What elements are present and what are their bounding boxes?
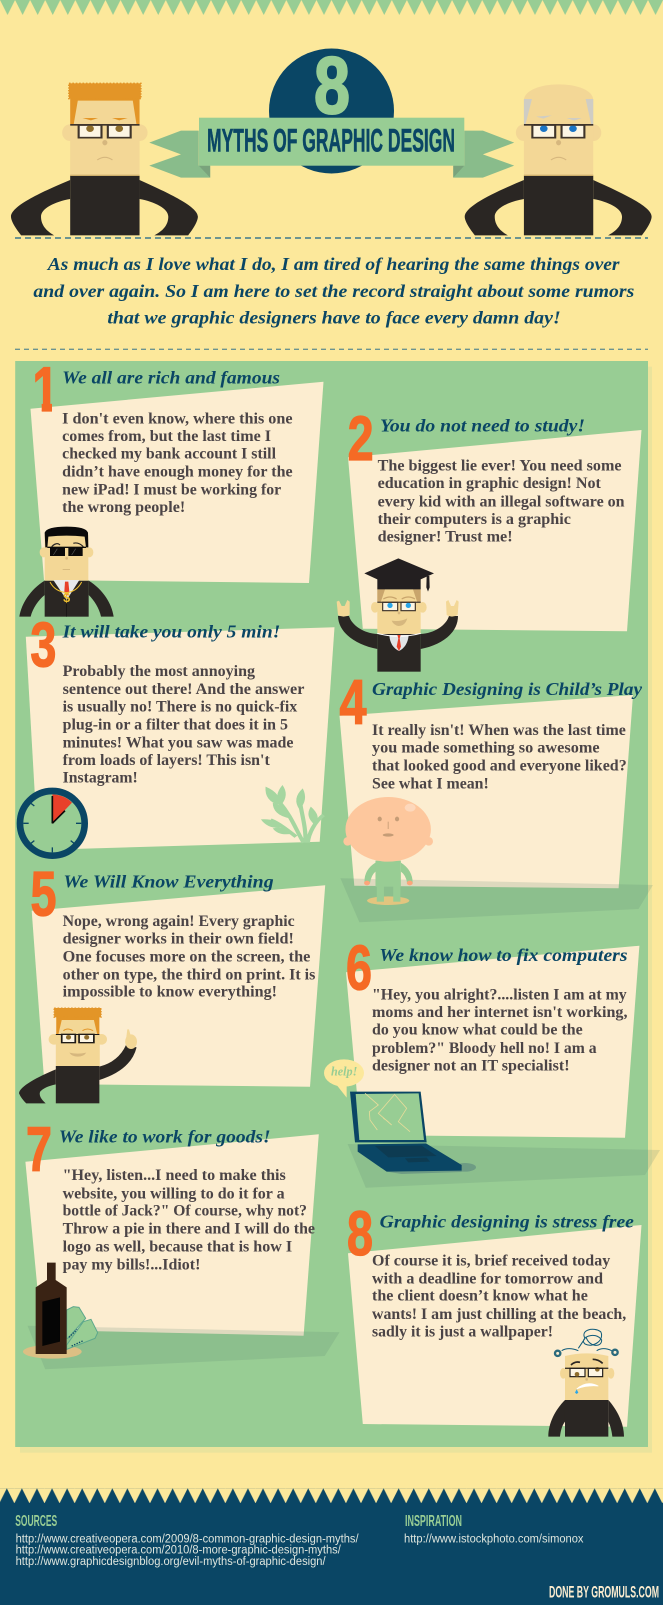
inspiration heading: INSPIRATION xyxy=(405,1513,462,1530)
body 3: Instagram! xyxy=(63,770,138,787)
myth 3 xyxy=(20,610,335,856)
character: baby xyxy=(343,797,433,905)
body 2: The biggest lie ever! You need some xyxy=(378,457,622,474)
card 6 xyxy=(346,946,639,1138)
big number 8: 8 xyxy=(314,41,350,131)
body 8: with a deadline for tomorrow and xyxy=(372,1270,603,1287)
number 3: 3 xyxy=(30,610,56,680)
intro text xyxy=(33,254,634,328)
ribbon tails xyxy=(149,131,514,178)
icon: broken laptop xyxy=(350,1092,476,1174)
card 1 xyxy=(30,382,324,583)
body 5: designer works in their own field! xyxy=(63,930,294,947)
body 2: their computers is a graphic xyxy=(378,511,571,528)
number 5: 5 xyxy=(30,860,56,930)
body 5 xyxy=(63,913,315,1001)
body 8: the client doesn’t know what he xyxy=(372,1288,588,1305)
ground shadow xyxy=(348,1144,660,1188)
heading 3: It will take you only 5 min! xyxy=(61,622,280,642)
navy circle xyxy=(269,48,394,174)
body 7 xyxy=(63,1167,315,1273)
character: designer with orange hair xyxy=(11,83,198,235)
ribbon band xyxy=(199,118,464,166)
myth 1 xyxy=(19,355,323,617)
body 2: every kid with an illegal software on xyxy=(378,493,625,510)
card 3 xyxy=(26,627,335,850)
number 2: 2 xyxy=(348,404,374,474)
card 2 xyxy=(348,430,642,631)
inspiration link: http://www.istockphoto.com/simonox xyxy=(404,1533,584,1545)
body 7: pay my bills!...Idiot! xyxy=(63,1256,200,1273)
intro text: that we graphic designers have to face every damn day! xyxy=(107,308,561,328)
body 1: the wrong people! xyxy=(62,499,185,516)
body 8: sadly it is just a wallpaper! xyxy=(372,1324,553,1341)
body 4: See what I mean! xyxy=(372,775,489,792)
myth 8 xyxy=(347,1199,642,1437)
source links: http://www.creativeopera.com/2010/8-more-graphic-design-myths/ xyxy=(16,1545,342,1557)
body 6: problem?" Bloody hell no! I am a xyxy=(372,1040,597,1057)
body 6 xyxy=(372,986,628,1074)
ground shadow xyxy=(340,878,653,922)
card 5 xyxy=(32,885,325,1087)
body 5: Nope, wrong again! Every graphic xyxy=(63,913,295,930)
body 2: education in graphic design! Not xyxy=(378,475,602,492)
number 4: 4 xyxy=(340,668,366,738)
character: designer pointing up xyxy=(19,1008,137,1103)
body 3: Probably the most annoying xyxy=(63,663,255,680)
body 7: logo as well, because that is how I xyxy=(63,1239,292,1256)
body 3: sentence out there! And the answer xyxy=(63,681,305,698)
myth 6 xyxy=(324,934,660,1188)
body 5: impossible to know everything! xyxy=(63,984,277,1001)
body 3 xyxy=(63,663,305,787)
number 8: 8 xyxy=(347,1199,373,1269)
body 7: website, you willing to do it for a xyxy=(63,1185,285,1202)
body 4: that looked good and everyone liked? xyxy=(372,757,627,774)
body 8: Of course it is, brief received today xyxy=(372,1253,610,1270)
myth 5 xyxy=(19,860,325,1103)
body 1: new iPad! I must be working for xyxy=(62,481,281,498)
body 8 xyxy=(372,1253,626,1341)
body 8: wants! I am just chilling at the beach, xyxy=(372,1306,626,1323)
card 7 xyxy=(25,1134,319,1336)
body 6: designer not an IT specialist! xyxy=(372,1057,570,1074)
body 2: designer! Trust me! xyxy=(378,528,513,545)
heading 4: Graphic Designing is Child’s Play xyxy=(372,679,642,699)
character: designer with grey hair xyxy=(465,84,652,235)
source links: http://www.creativeopera.com/2009/8-common-graphic-design-myths/ xyxy=(16,1533,359,1545)
myth 4 xyxy=(340,668,653,922)
speech bubble: help xyxy=(324,1059,364,1098)
body 7: "Hey, listen...I need to make this xyxy=(63,1167,286,1184)
card 8 xyxy=(348,1225,642,1427)
body 6: "Hey, you alright?....listen I am at my xyxy=(372,986,627,1003)
heading 7: We like to work for goods! xyxy=(59,1127,271,1147)
character: graduate xyxy=(337,558,459,672)
heading 8: Graphic designing is stress free xyxy=(380,1211,634,1231)
body 3: plug-in or a filter that does it in 5 xyxy=(63,716,288,733)
body 1: comes from, but the last time I xyxy=(62,428,271,445)
footer xyxy=(0,1488,663,1605)
character: rich man with sunglasses xyxy=(19,527,114,617)
body 7: bottle of Jack?" Of course, why not? xyxy=(63,1203,307,1220)
intro text: and over again. So I am here to set the record straight about some rumors xyxy=(33,281,634,301)
body 4: It really isn't! When was the last time xyxy=(372,722,626,739)
heading 2: You do not need to study! xyxy=(380,416,585,436)
icon: clock xyxy=(20,791,85,856)
body 4: you made something so awesome xyxy=(372,740,600,757)
character: stressed designer xyxy=(548,1329,624,1437)
sources heading: SOURCES xyxy=(15,1513,57,1530)
heading 5: We Will Know Everything xyxy=(63,872,274,892)
myth 2 xyxy=(337,404,642,672)
body 1: I don't even know, where this one xyxy=(62,410,293,427)
body 6: moms and her internet isn't working, xyxy=(372,1004,628,1021)
heading 1: We all are rich and famous xyxy=(62,367,280,387)
source links: http://www.graphicdesignblog.org/evil-myths-of-graphic-design/ xyxy=(16,1556,326,1568)
title badge xyxy=(149,41,514,178)
body 5: other on type, the third on print. It is xyxy=(63,966,315,983)
myth 7 xyxy=(23,1115,340,1369)
number 7: 7 xyxy=(26,1115,52,1185)
heading 6: We know how to fix computers xyxy=(379,945,628,965)
body 1 xyxy=(62,410,293,516)
body 1: didn’t have enough money for the xyxy=(62,464,293,481)
body 5: One focuses more on the screen, the xyxy=(63,949,311,966)
body 6: do you know what could be the xyxy=(372,1021,583,1038)
body 4 xyxy=(372,722,627,792)
speech bubble: help: help! xyxy=(331,1063,357,1078)
icon: bottle and money xyxy=(23,1263,98,1359)
body 1: checked my bank account I still xyxy=(62,446,277,463)
body 3: from loads of layers! This isn't xyxy=(63,752,271,769)
footer band xyxy=(0,1503,663,1605)
source links xyxy=(16,1533,359,1568)
panel shadow xyxy=(20,367,652,1453)
body 3: minutes! What you saw was made xyxy=(63,735,294,752)
number 1: 1 xyxy=(32,355,58,425)
green panel xyxy=(15,361,648,1447)
ground shadow xyxy=(28,1326,340,1369)
intro text: As much as I love what I do, I am tired of hearing the same things over xyxy=(47,254,621,274)
icon: plant xyxy=(261,785,323,843)
title text: MYTHS OF GRAPHIC DESIGN xyxy=(207,123,455,159)
card 4 xyxy=(340,695,633,888)
body 7: Throw a pie in there and I will do the xyxy=(63,1220,315,1237)
bunting top border xyxy=(0,0,663,15)
body 3: is usually no! There is no quick-fix xyxy=(63,699,298,716)
body 2 xyxy=(378,457,625,545)
footer teeth xyxy=(0,1488,663,1503)
character: rich man with sunglasses: $ xyxy=(63,591,70,605)
number 6: 6 xyxy=(346,934,372,1004)
